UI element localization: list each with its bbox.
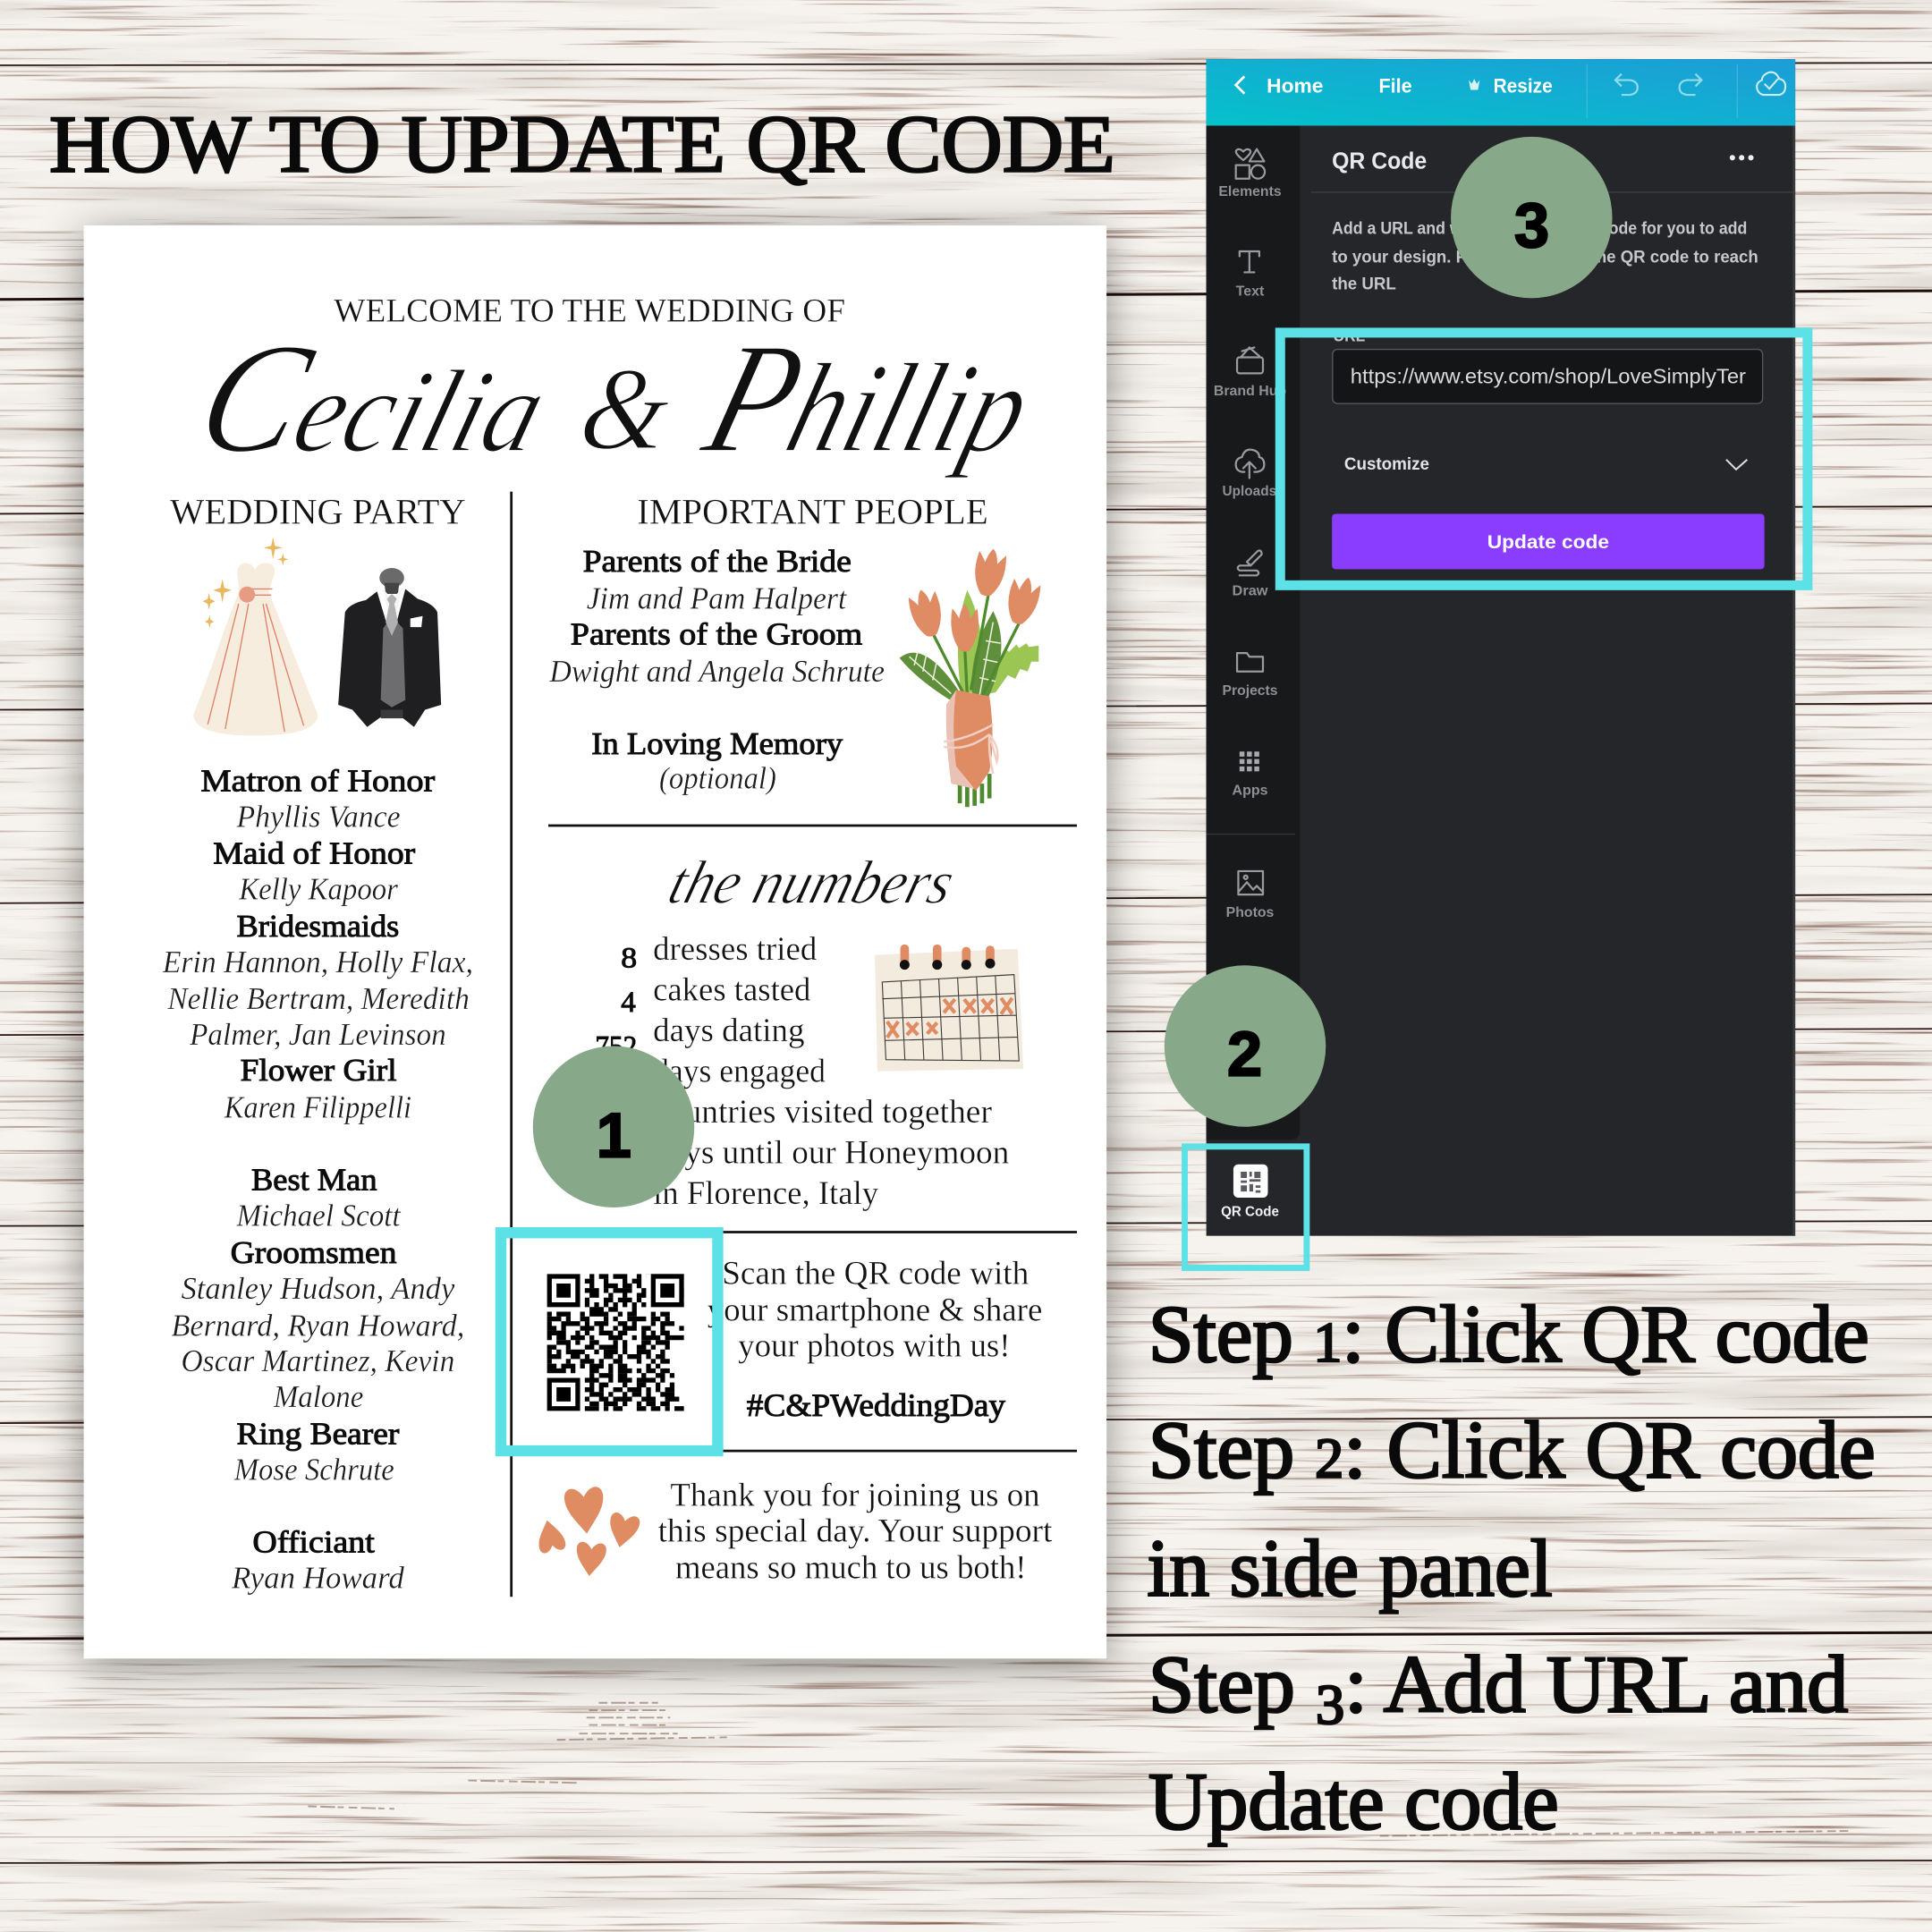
text block: groom's party: Michael Scott — [236, 1199, 402, 1233]
icon: black tuxedo — [338, 568, 441, 727]
text block: groom's party: Officiant — [252, 1526, 375, 1560]
statistics list labels: days dating — [653, 1013, 805, 1049]
step badge 3: 3 — [1514, 190, 1549, 260]
icon: photos — [1238, 871, 1263, 894]
icon: tulip bouquet — [900, 547, 1043, 807]
statistics list numbers: 4 — [621, 987, 636, 1019]
text block: groom's party: Oscar Martinez, Kevin — [182, 1344, 454, 1378]
statistics list labels: days engaged — [653, 1053, 826, 1089]
editor sidebar: Projects — [1223, 683, 1278, 699]
column divider — [511, 492, 513, 1597]
editor top bar: Home — [1267, 74, 1323, 97]
text block: scan instructions — [708, 1255, 1042, 1423]
steps text block: Step 1: Click QR code — [1148, 1289, 1869, 1379]
text block: parents and memory: Dwight and Angela Schrute — [548, 655, 885, 689]
text block: bridal party: Matron of Honor — [201, 764, 436, 798]
text block: groom's party: Stanley Hudson, Andy — [182, 1272, 455, 1306]
editor sidebar: Draw — [1233, 583, 1268, 598]
text block: groom's party: Groomsmen — [231, 1236, 397, 1270]
text block: bridal party: Erin Hannon, Holly Flax, — [162, 945, 473, 979]
highlight box: sidebar QR code tab — [1185, 1147, 1307, 1268]
editor top bar: File — [1378, 74, 1412, 97]
text block: groom's party: Ryan Howard — [231, 1562, 405, 1596]
couple names in script: Phillip — [688, 310, 1053, 485]
icon: brand hub — [1237, 347, 1263, 373]
text block: bridal party: Bridesmaids — [236, 910, 399, 944]
step badge 2: 2 — [1227, 1019, 1262, 1089]
icon: active QR code tab — [1233, 1165, 1268, 1198]
customize row — [1344, 455, 1747, 474]
script heading: the numbers: the numbers — [661, 849, 962, 917]
steps text block: Step 2: Click QR code — [1148, 1405, 1876, 1496]
QR code — [547, 1274, 684, 1411]
text block: thank you note: means so much to us both! — [675, 1550, 1027, 1587]
URL field: URL — [1334, 327, 1365, 345]
icon: wedding dress with sparkles — [193, 538, 318, 735]
statistics list numbers: 752 — [595, 1031, 637, 1063]
text block: thank you note: Thank you for joining us on — [670, 1477, 1040, 1513]
icon: uploads — [1236, 450, 1264, 478]
statistics list labels: days until our Honeymoon — [653, 1134, 1010, 1171]
highlight box: QR code on card — [501, 1233, 717, 1451]
text block: groom's party: Malone — [273, 1380, 363, 1414]
editor top bar — [1207, 59, 1795, 126]
steps text block: : Add URL and — [1344, 1639, 1848, 1729]
QR code panel header — [1311, 148, 1795, 192]
statistics list labels: in Florence, Italy — [653, 1175, 879, 1212]
editor sidebar: QR Code — [1221, 1205, 1279, 1220]
text block: bridal party: Karen Filippelli — [224, 1090, 411, 1124]
update code button: Update code — [1487, 531, 1609, 553]
text block: bridal party: Flower Girl — [241, 1054, 397, 1088]
text block: groom's party: Bernard, Ryan Howard, — [171, 1309, 464, 1343]
text block: groom's party: Best Man — [251, 1164, 377, 1198]
steps text block: in side panel — [1147, 1523, 1553, 1614]
icon: text — [1240, 251, 1259, 272]
icon: elements — [1236, 149, 1265, 179]
text block: parents and memory: In Loving Memory — [591, 727, 843, 761]
editor sidebar: Text — [1236, 284, 1265, 300]
step badge 1: 1 — [597, 1100, 631, 1171]
text block: scan instructions: your photos with us! — [738, 1328, 1011, 1365]
main title: HOW TO UPDATE QR CODE — [49, 98, 1115, 189]
statistics list numbers — [595, 942, 637, 1063]
URL field: https://www.etsy.com/shop/LoveSimplyTer — [1351, 364, 1746, 387]
editor sidebar: Brand Hub — [1214, 384, 1286, 399]
text block: bridal party: Maid of Honor — [213, 837, 416, 871]
editor top bar: Resize — [1494, 74, 1553, 97]
text block: groom's party: Mose Schrute — [233, 1453, 394, 1487]
editor sidebar: Elements — [1218, 184, 1282, 199]
statistics list labels: cakes tasted — [653, 972, 811, 1009]
icon: projects — [1237, 653, 1263, 672]
text block: bridal party — [162, 764, 473, 1124]
text block: parents and memory: Parents of the Bride — [583, 545, 852, 579]
text block: bridal party: Palmer, Jan Levinson — [189, 1018, 446, 1052]
text block: groom's party: Ring Bearer — [236, 1417, 400, 1451]
steps text block: Update code — [1148, 1756, 1559, 1846]
QR code panel header: QR Code — [1332, 148, 1427, 174]
panel description: to your design. People can scan the QR code to reach — [1332, 248, 1758, 267]
text block: parents and memory: Parents of the Groom — [571, 617, 863, 651]
editor sidebar — [1207, 126, 1300, 1220]
text block: parents and memory — [548, 545, 885, 796]
steps text block: 3 — [1316, 1674, 1344, 1736]
text block: bridal party: Phyllis Vance — [236, 800, 401, 834]
panel description: the URL — [1332, 275, 1396, 294]
icon: draw — [1238, 550, 1262, 575]
panel description: Add a URL and we'll generate a QR code for you to add — [1332, 220, 1747, 239]
text block: scan instructions: #C&PWeddingDay — [747, 1387, 1005, 1423]
text block: groom's party — [171, 1164, 464, 1596]
couple names in script — [182, 310, 1053, 485]
panel: Canva QR code editor screenshot — [1207, 59, 1795, 1236]
text block: scan instructions: your smartphone & share — [708, 1292, 1042, 1329]
text block: parents and memory: Jim and Pam Halpert — [587, 582, 848, 616]
statistics list numbers: 8 — [621, 942, 637, 974]
editor sidebar: Apps — [1233, 784, 1268, 799]
text block: parents and memory: (optional) — [659, 762, 776, 796]
highlight box: URL and update code — [1280, 333, 1808, 585]
step badge 2 — [1165, 965, 1326, 1127]
customize row: Customize — [1344, 455, 1429, 474]
couple names in script: Cecilia — [182, 310, 570, 485]
text block: thank you note: this special day. Your support — [658, 1513, 1053, 1549]
wedding party heading: WEDDING PARTY — [170, 491, 466, 531]
statistics list labels: dresses tried — [653, 931, 818, 968]
statistics list labels — [653, 931, 1010, 1212]
steps text block: Step — [1148, 1639, 1293, 1729]
text block: bridal party: Nellie Bertram, Meredith — [166, 982, 470, 1016]
text block: bridal party: Kelly Kapoor — [238, 873, 399, 907]
editor sidebar: Photos — [1226, 905, 1275, 920]
step badge 1 — [533, 1046, 694, 1208]
important people heading: IMPORTANT PEOPLE — [637, 491, 988, 531]
panel description — [1332, 220, 1758, 294]
steps text block — [1147, 1289, 1876, 1846]
icon: calendar — [875, 949, 1023, 1072]
update code button — [1332, 513, 1765, 569]
text block: thank you note — [658, 1477, 1053, 1587]
URL field — [1333, 327, 1763, 403]
icon: hearts — [534, 1487, 641, 1578]
statistics list labels: countries visited together — [653, 1094, 993, 1131]
step badge 3 — [1451, 137, 1613, 298]
section dividers — [548, 826, 1077, 1451]
card heading: WELCOME TO THE WEDDING OF — [334, 293, 845, 330]
couple names in script: & — [573, 343, 678, 474]
panel: wedding program card — [84, 225, 1106, 1658]
text block: scan instructions: Scan the QR code with — [722, 1255, 1030, 1292]
icon: apps — [1240, 751, 1259, 771]
editor sidebar: Uploads — [1223, 484, 1276, 499]
